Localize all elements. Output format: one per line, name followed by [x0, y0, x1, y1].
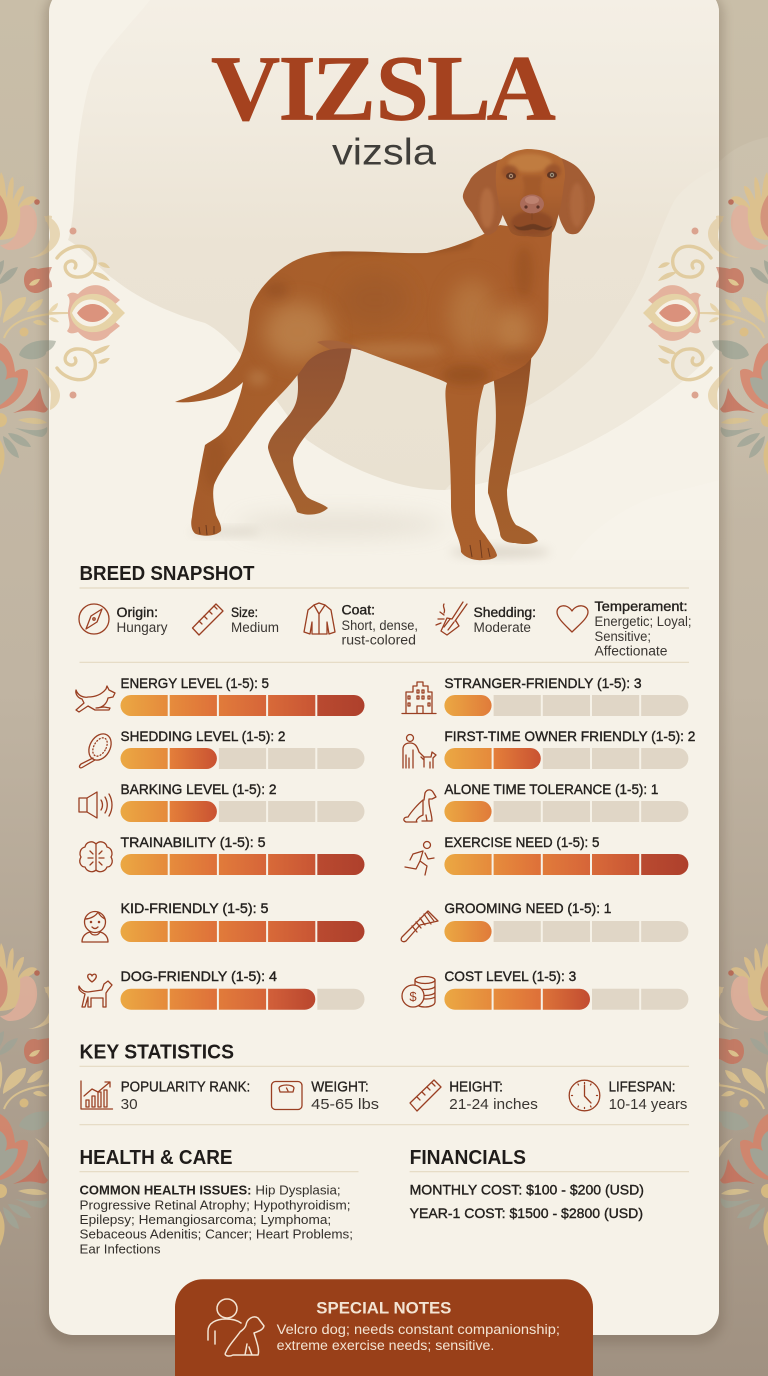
temperament text: Temperament:: [594, 599, 688, 614]
heading: breed snapshot: BREED SNAPSHOT: [80, 563, 254, 585]
height: [449, 1079, 538, 1113]
shedding text: Moderate: [474, 620, 531, 635]
coat text: rust-colored: [342, 633, 416, 648]
weight: 45-65 lbs: [311, 1096, 379, 1113]
icon: compass: [79, 604, 109, 634]
rating: alone time tolerance: ALONE TIME TOLERANCE (1-5): 1: [444, 781, 659, 797]
special notes text: Velcro dog; needs constant companionship;: [277, 1322, 560, 1337]
icon: kid: [82, 912, 108, 942]
temperament text: Sensitive;: [594, 629, 651, 644]
rating: cost level: [444, 968, 688, 1010]
section: key statistics: [80, 1041, 689, 1125]
far front leg: [488, 350, 538, 544]
icon: brain: [80, 842, 112, 872]
icon: runner: [405, 842, 434, 875]
shedding text: Shedding:: [474, 605, 536, 620]
size text: Size:: [231, 605, 258, 620]
popularity rank: POPULARITY RANK:: [121, 1079, 250, 1096]
icon: person with dog: [208, 1299, 264, 1356]
rating: grooming need: [444, 900, 688, 942]
rating: kid-friendly: KID-FRIENDLY (1-5): 5: [120, 900, 269, 916]
rating: barking level: BARKING LEVEL (1-5): 2: [120, 781, 277, 797]
icon: ruler: [410, 1080, 441, 1111]
head and ears: [463, 149, 595, 237]
heading: special notes: SPECIAL NOTES: [316, 1298, 451, 1317]
icon: coins: [402, 976, 435, 1007]
ground shadow: [190, 513, 550, 558]
icon: weighing scale: [272, 1082, 302, 1110]
weight: WEIGHT:: [311, 1079, 369, 1096]
rating: barking level: [120, 781, 364, 822]
lifespan: 10-14 years: [609, 1096, 687, 1113]
origin text: Origin:: [116, 605, 158, 620]
floral motif: right in panel: [643, 216, 719, 410]
popularity rank: [121, 1079, 250, 1113]
health issues text: Sebaceous Adenitis; Cancer; Heart Problems;: [80, 1227, 353, 1242]
temperament text: Energetic; Loyal;: [594, 614, 692, 629]
lifespan: LIFESPAN:: [609, 1079, 676, 1096]
health issues text: [80, 1183, 353, 1256]
icon: hairbrush: [80, 730, 116, 768]
rating: kid-friendly: [120, 900, 364, 942]
rating: trainability: TRAINABILITY (1-5): 5: [120, 834, 266, 850]
rating: stranger-friendly: [444, 675, 688, 716]
health issues text: COMMON HEALTH ISSUES:: [80, 1183, 252, 1198]
size text: [231, 605, 279, 635]
rating: exercise need: EXERCISE NEED (1-5): 5: [444, 834, 600, 850]
rating: first-time owner friendly: FIRST-TIME OWNER FRIENDLY (1-5): 2: [444, 728, 696, 744]
year-1 cost: YEAR-1 COST: $1500 - $2800 (USD): [410, 1205, 643, 1221]
callout: special notes: [175, 1279, 593, 1376]
rating: stranger-friendly: STRANGER-FRIENDLY (1-5): 3: [444, 675, 642, 691]
icon: shedding brush: [436, 602, 467, 635]
icon: building: [402, 682, 436, 714]
weight: [311, 1079, 379, 1113]
floral motif: left in panel: [49, 216, 125, 410]
rating: cost level: COST LEVEL (1-5): 3: [444, 968, 576, 984]
temperament text: Affectionate: [594, 644, 668, 659]
body: [175, 225, 552, 560]
health issues text: Epilepsy; Hemangiosarcoma; Lymphoma;: [80, 1212, 331, 1227]
far hind leg: [268, 345, 352, 515]
icon: person with dog: [403, 734, 436, 768]
popularity rank: 30: [121, 1096, 138, 1113]
rating: shedding level: SHEDDING LEVEL (1-5): 2: [120, 728, 286, 744]
icon: running dog: [76, 686, 115, 712]
rating: alone time tolerance: [444, 781, 688, 822]
health issues text: Hip Dysplasia;: [255, 1183, 341, 1198]
rating: shedding level: [120, 728, 364, 769]
origin text: [116, 605, 168, 635]
coat text: Coat:: [342, 603, 375, 618]
lifespan: [609, 1079, 687, 1113]
rating: energy level: ENERGY LEVEL (1-5): 5: [120, 675, 269, 691]
rating: dog-friendly: DOG-FRIENDLY (1-5): 4: [120, 968, 277, 984]
rating: grooming need: GROOMING NEED (1-5): 1: [444, 900, 612, 916]
height: 21-24 inches: [449, 1096, 538, 1113]
height: HEIGHT:: [449, 1079, 503, 1096]
rating: trainability: [120, 834, 364, 875]
icon: clock: [569, 1080, 600, 1111]
section: health and care: [80, 1147, 358, 1256]
monthly cost: MONTHLY COST: $100 - $200 (USD): [410, 1182, 644, 1198]
size text: Medium: [231, 620, 279, 635]
icon: dog with heart: [79, 974, 112, 1007]
rating: energy level: [120, 675, 364, 716]
icon: speaker: [79, 792, 112, 818]
icon: coat: [304, 603, 335, 634]
section: breed snapshot: [79, 563, 692, 662]
temperament text: [594, 599, 692, 659]
coat text: Short, dense,: [342, 618, 418, 633]
icon: ruler: [192, 604, 223, 635]
dog illustration: [175, 149, 595, 560]
coin symbol: $: [409, 989, 417, 1004]
floral border: left: [0, 172, 49, 1246]
subtitle: vizsla: [332, 132, 436, 172]
icon: heart: [557, 606, 588, 632]
heading: financials: FINANCIALS: [410, 1147, 526, 1169]
rating: dog-friendly: [120, 968, 364, 1010]
rating: first-time owner friendly: [444, 728, 696, 769]
rating: exercise need: [444, 834, 688, 875]
icon: rising chart: [81, 1081, 112, 1109]
special notes text: [277, 1322, 560, 1353]
section: financials: [410, 1147, 689, 1221]
health issues text: Progressive Retinal Atrophy; Hypothyroidism;: [80, 1197, 350, 1212]
shedding text: [474, 605, 536, 635]
health issues text: Ear Infections: [80, 1241, 161, 1256]
icon: sitting dog: [404, 790, 436, 822]
title: VIZSLA: [211, 38, 556, 140]
special notes text: extreme exercise needs; sensitive.: [277, 1338, 494, 1353]
coat text: [342, 603, 418, 648]
section: ratings: [76, 675, 696, 1010]
floral border: right: [719, 172, 768, 1246]
icon: comb: [401, 911, 438, 942]
origin text: Hungary: [116, 620, 168, 635]
heading: health and care: HEALTH & CARE: [80, 1147, 232, 1169]
heading: key statistics: KEY STATISTICS: [80, 1041, 234, 1063]
